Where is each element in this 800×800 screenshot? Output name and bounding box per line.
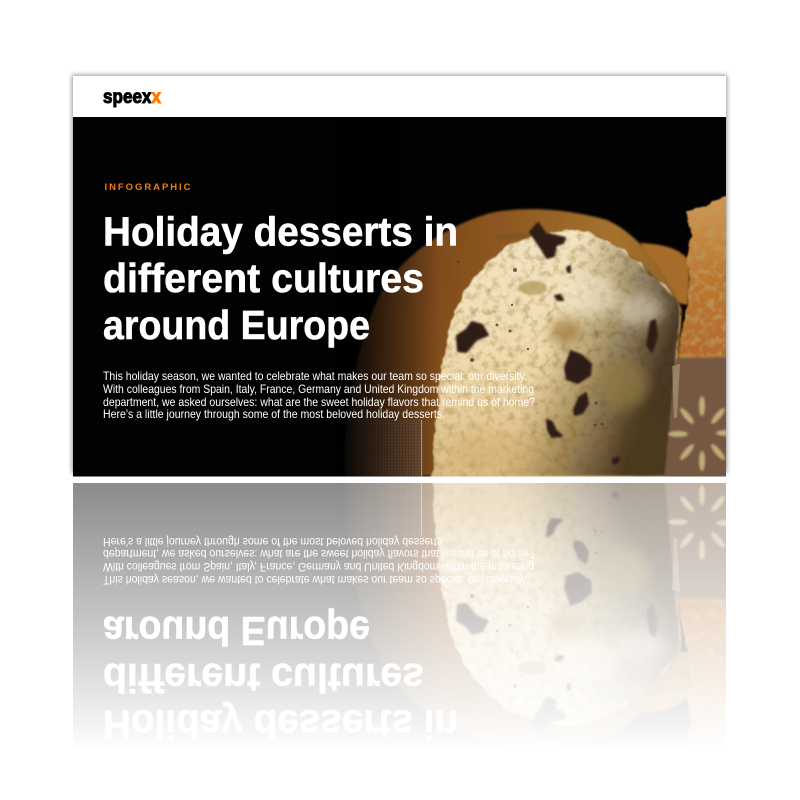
reflection of the hero: Here’s a little journey through some of the most beloved holiday desserts.: [103, 535, 445, 548]
crumb shading: [596, 361, 648, 409]
right cake piece: [676, 192, 730, 364]
reflection of the hero: different cultures: [103, 655, 424, 701]
panel: white header bar: [73, 76, 726, 117]
intro paragraph: With colleagues from Spain, Italy, France, Germany and United Kingdom within the marketing: [103, 383, 534, 396]
logo: speexx: speexx: [103, 87, 161, 108]
reflection of the hero: This holiday season, we wanted to celebrate what makes our team so special: our diversity.: [103, 573, 527, 586]
dark fade over left side of the photo: [335, 117, 440, 477]
crumb: [433, 230, 680, 480]
title: different cultures: [103, 255, 424, 301]
title: [103, 209, 458, 348]
gold flower ornament: [668, 396, 736, 471]
reflection of the hero: department, we asked ourselves: what are the sweet holiday flavors that remind us of home?: [103, 547, 535, 560]
background piece: [640, 243, 690, 305]
intro paragraph: [103, 370, 535, 421]
panel: hero: [73, 116, 736, 480]
intro paragraph: department, we asked ourselves: what are the sweet holiday flavors that remind us of home?: [103, 396, 535, 409]
title: around Europe: [103, 302, 370, 348]
small crumbs: [456, 260, 604, 426]
title: Holiday desserts in: [103, 209, 458, 255]
right burlap wrapper: [664, 357, 730, 480]
reflection of the hero: Holiday desserts in: [103, 701, 458, 747]
reflection of the hero: around Europe: [103, 608, 370, 654]
intro paragraph: Here’s a little journey through some of the most beloved holiday desserts.: [103, 408, 445, 421]
crust: [345, 209, 682, 476]
reflection of the hero: With colleagues from Spain, Italy, France, Germany and United Kingdom within the marketing: [103, 560, 534, 573]
eyebrow: INFOGRAPHIC: INFOGRAPHIC: [104, 182, 191, 193]
intro paragraph: This holiday season, we wanted to celebrate what makes our team so special: our diversity.: [103, 370, 527, 383]
card shadow: [72, 75, 727, 473]
photo: panettone with chocolate chips: [335, 117, 736, 480]
chocolate chips: [457, 223, 657, 463]
reflection of the hero: [73, 483, 726, 732]
burlap wrapper left: [345, 420, 423, 478]
